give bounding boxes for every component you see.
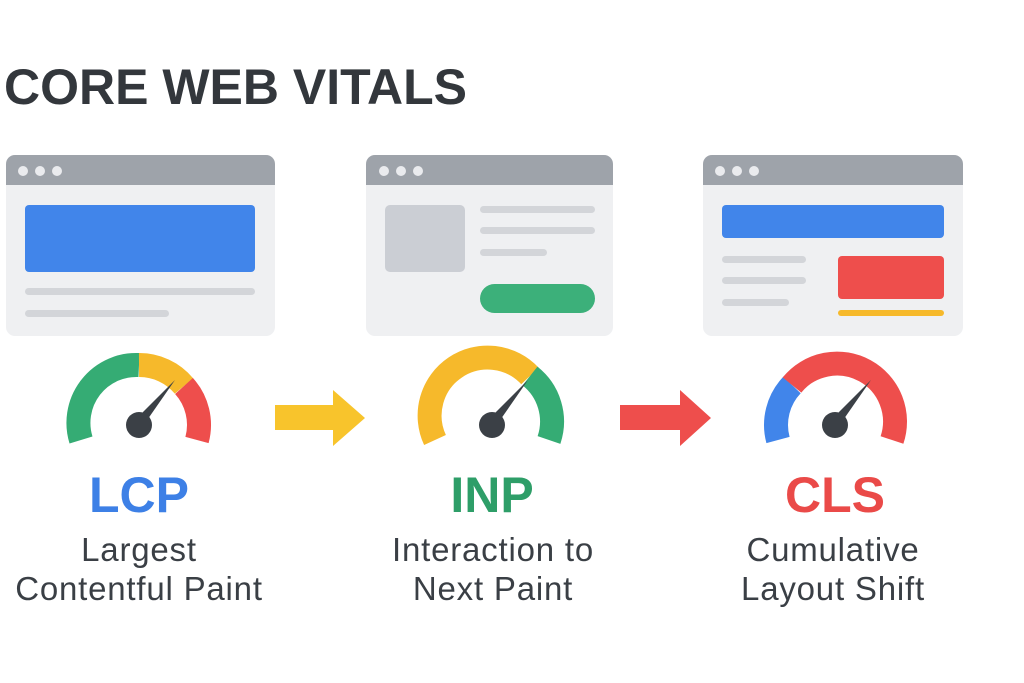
panel: INP browser xyxy=(366,155,613,336)
icon: INP gauge xyxy=(430,358,552,440)
panel: CLS browser xyxy=(703,155,963,336)
text: LCP description: Contentful Paint xyxy=(15,570,263,607)
arrow: red xyxy=(620,390,711,446)
text: CLS description: Layout Shift xyxy=(741,570,925,607)
panel: LCP browser xyxy=(6,155,275,336)
text: INP description: Next Paint xyxy=(413,570,573,607)
title: CORE WEB VITALS xyxy=(4,59,467,115)
text: INP description xyxy=(392,531,594,607)
text: LCP description xyxy=(15,531,263,607)
text: INP description: Interaction to xyxy=(392,531,594,568)
text: CLS description xyxy=(741,531,925,607)
label: CLS: CLS xyxy=(785,467,885,523)
arrow: yellow xyxy=(275,390,365,446)
label: INP: INP xyxy=(450,467,534,523)
text: LCP description: Largest xyxy=(81,531,197,568)
icon: CLS gauge xyxy=(776,364,895,440)
label: LCP: LCP xyxy=(89,467,189,523)
text: CLS description: Cumulative xyxy=(746,531,920,568)
icon: LCP gauge xyxy=(78,365,199,440)
